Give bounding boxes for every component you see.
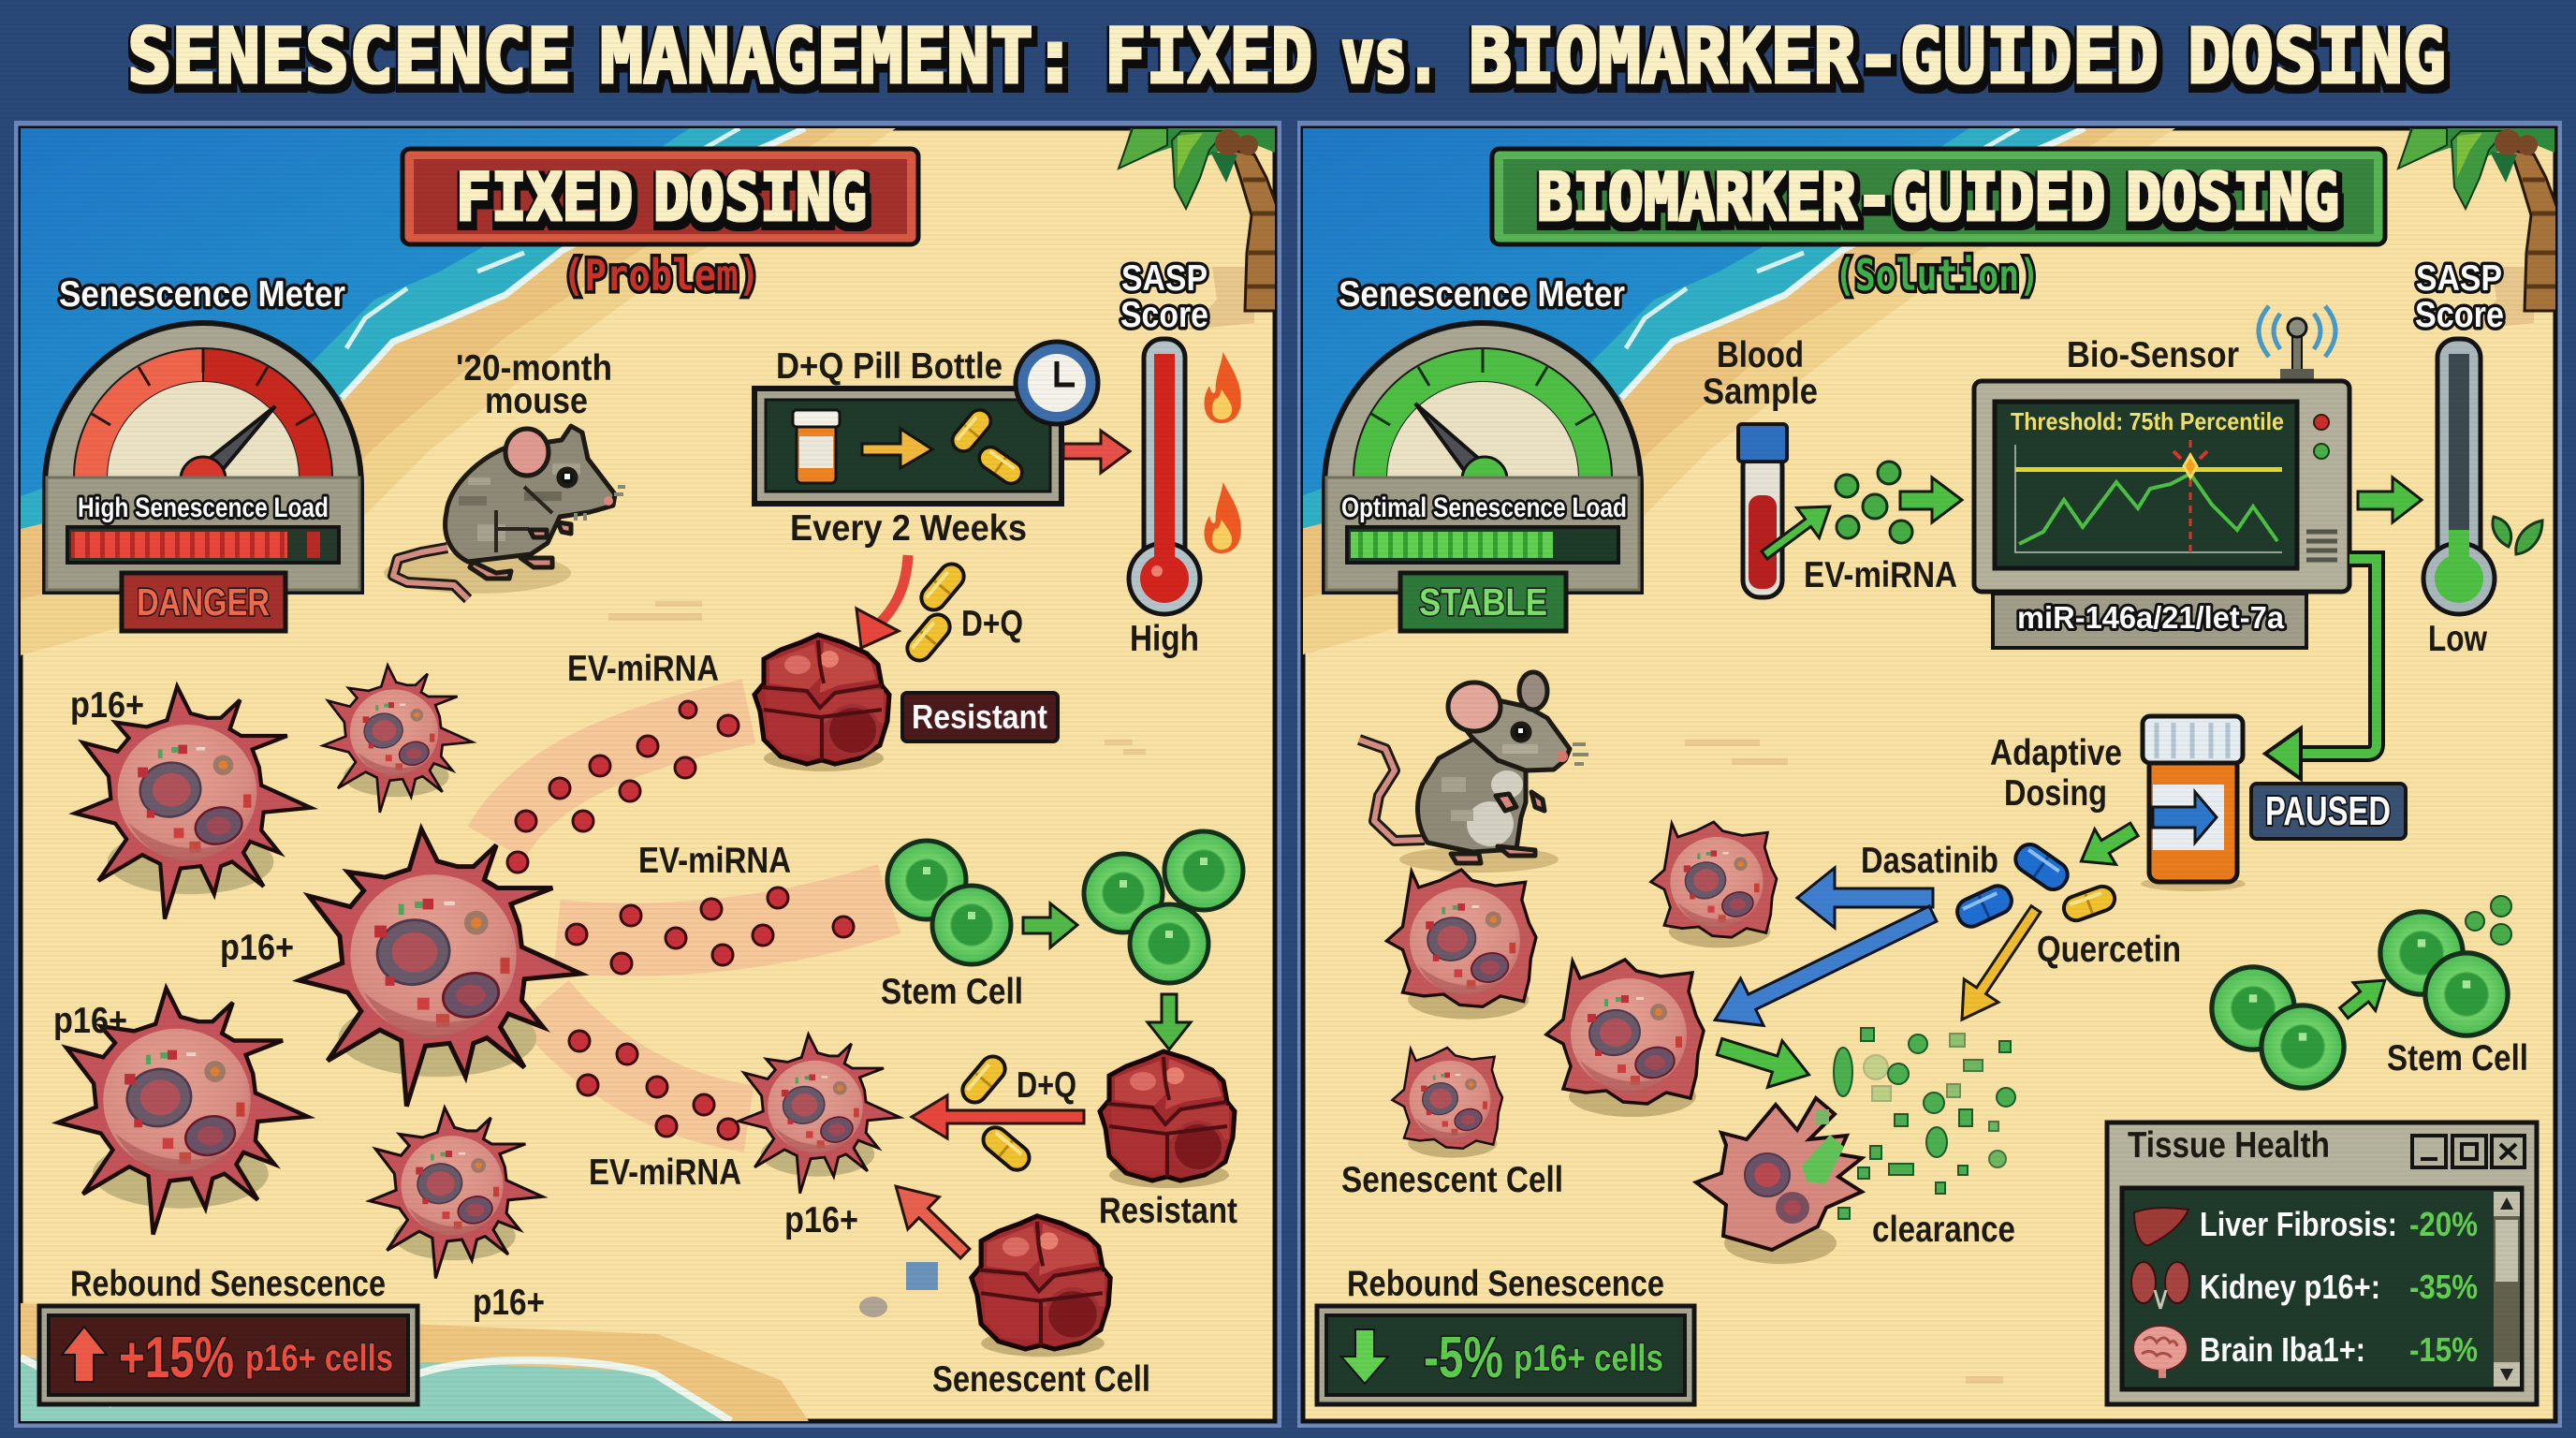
stem cells: upper pair (2380, 912, 2508, 1035)
arrow: dose to resistant cell (856, 555, 908, 648)
icon: dasatinib and quercetin pills (1953, 840, 2118, 931)
label: senescent cell: Senescent Cell (1341, 1160, 1563, 1200)
heading plate: fixed dosing: FIXED (456, 159, 633, 236)
stream: ev-mirna to p16 cell (543, 1002, 749, 1139)
arrow: stem recovery (2333, 966, 2396, 1027)
label: bio-sensor: Bio-Sensor (2067, 335, 2239, 375)
row: brain iba1+: -15% (2409, 1330, 2478, 1369)
icon: liver (2134, 1208, 2188, 1245)
labels: ev-mirna: EV-miRNA (589, 1152, 741, 1193)
icon: thermometer low (2423, 339, 2495, 614)
label: every 2 weeks: Every 2 Weeks (790, 508, 1027, 549)
badge: mirna panel: miR-146a/21/let-7a (2017, 600, 2285, 635)
senescent cells: p16+ cluster (58, 666, 900, 1278)
arrow: senescent to p16 cell (880, 1170, 981, 1269)
icon: flames (1205, 352, 1241, 553)
heading plate: fixed dosing: DOSING (653, 159, 867, 236)
arrow: dasatinib to cell (1797, 868, 1933, 928)
panel: biomarker-guided dosing (1297, 124, 2559, 1425)
panel: fixed dosing (17, 124, 1279, 1425)
arrow: sensor to adaptive dosing (2265, 559, 2377, 779)
heading plate: biomarker-guided dosing: DOSING (2126, 159, 2339, 236)
badge: resistant: Resistant (912, 697, 1047, 736)
labels: p16+: p16+ (473, 1283, 545, 1323)
labels: p16+: p16+ (70, 685, 144, 726)
label: quercetin: Quercetin (2037, 930, 2181, 970)
arrow: stem to resistant (1148, 994, 1191, 1049)
label: high: High (1130, 619, 1199, 659)
badge: paused: PAUSED (2265, 788, 2391, 834)
label: 20-month mouse: mouse (485, 381, 588, 421)
stream: ev-mirna to resistant (496, 701, 749, 873)
labels: p16+: p16+ (220, 928, 294, 968)
heading plate: fixed dosing (402, 149, 918, 244)
stem cells: right cluster (1084, 831, 1243, 983)
senescent cell: bursting (1696, 1098, 1862, 1264)
label: blood sample (1703, 335, 1818, 412)
icon: clock (1016, 342, 1098, 424)
labels: p16+: p16+ (784, 1200, 858, 1240)
gauge: optimal senescence: STABLE (1419, 580, 1547, 624)
subheading: solution: (Solution) (1835, 250, 2040, 301)
scrollbar (2494, 1192, 2520, 1387)
label: rebound senescence: Rebound Senescence (1347, 1264, 1664, 1304)
label: dasatinib: Dasatinib (1861, 841, 1998, 881)
arrow: blood to ev-mirna (1753, 492, 1841, 570)
icon: d+q pills (902, 559, 969, 666)
heading plate: biomarker-guided dosing: BIOMARKER-GUIDED (1537, 159, 2105, 236)
panel: tissue health window (2107, 1123, 2537, 1404)
label: 20-month mouse (456, 348, 612, 421)
icon: ev-mirna particles (1836, 462, 1912, 543)
row: brain iba1+ (2200, 1330, 2478, 1369)
icon: kidneys (2131, 1262, 2189, 1309)
labels: ev-mirna: EV-miRNA (567, 649, 719, 689)
labels: ev-mirna (567, 649, 791, 1193)
panel: bio-sensor monitor (1974, 381, 2349, 592)
panel: rebound result -5%: -5% (1424, 1326, 1503, 1390)
panel: tissue health window: Tissue Health (2128, 1125, 2330, 1166)
title: DOSING (2188, 13, 2446, 101)
decoration: small beach items (859, 1262, 938, 1317)
label: senescence meter: Senescence Meter (59, 274, 345, 315)
label: rebound senescence: Rebound Senescence (70, 1264, 386, 1304)
window buttons (2412, 1136, 2525, 1167)
panel: rebound result -5% (1317, 1306, 1694, 1404)
labels: p16+ (53, 685, 858, 1323)
label: stem cell: Stem Cell (2387, 1038, 2528, 1078)
arrow: quercetin to debris (1945, 898, 2053, 1031)
resistant cells (754, 635, 1235, 1357)
label: senescent cell: Senescent Cell (932, 1359, 1150, 1400)
arrow: dasatinib to large cell (1704, 890, 1944, 1044)
gauge: high senescence: DANGER (137, 580, 270, 624)
panel: rebound result +15% (39, 1306, 417, 1404)
icon: healthy mouse (1359, 672, 1588, 873)
panel: rebound result +15%: p16+ cells (245, 1338, 393, 1379)
panel: rebound result +15%: +15% (119, 1326, 234, 1390)
arrow: stem progression (1023, 903, 1077, 947)
panel: pill bottle schedule (754, 389, 1061, 504)
label: d+q: D+Q (961, 604, 1023, 644)
title: SENESCENCE (127, 13, 571, 101)
label: resistant: Resistant (1099, 1191, 1237, 1231)
label: blood sample: Sample (1703, 372, 1818, 412)
label: low: Low (2428, 619, 2488, 659)
icon: small bottle (793, 410, 840, 483)
labels: ev-mirna: EV-miRNA (638, 841, 791, 881)
badge: paused (2251, 784, 2406, 839)
label: clearance: clearance (1872, 1210, 2015, 1250)
icon: brain (2133, 1326, 2188, 1378)
label: stem cell: Stem Cell (881, 972, 1023, 1012)
label: pill bottle: D+Q Pill Bottle (776, 346, 1003, 387)
icon: thermometer high (1129, 339, 1200, 614)
label: sasp score: SASP (2416, 258, 2502, 299)
icon: antenna (2259, 306, 2335, 382)
icon: pills (948, 405, 1026, 488)
senescent cells: treated (1386, 822, 1777, 1158)
label: sasp score (1120, 258, 1208, 335)
arrow: bottle to pills (862, 429, 932, 468)
label: blood sample: Blood (1717, 335, 1804, 375)
icon: stem particles (2466, 896, 2511, 945)
icon: aged mouse (384, 426, 625, 599)
gauge: high senescence: High Senescence Load (78, 492, 329, 523)
subheading: problem: (Problem) (563, 250, 760, 301)
row: liver fibrosis: -20% (2409, 1205, 2478, 1243)
icon: leaves (2493, 517, 2542, 554)
arrow: resistant to p16 cell (912, 1095, 1084, 1138)
label: senescence meter: Senescence Meter (1339, 274, 1625, 315)
heading plate: biomarker-guided dosing (1492, 149, 2385, 244)
arrow: to thermometer (1063, 431, 1130, 473)
icon: blood tube (1738, 424, 1787, 597)
title: FIXED (1105, 13, 1312, 101)
stream: ev-mirna to stem cells (557, 888, 889, 974)
badge: mirna panel (1993, 594, 2306, 648)
stem cells: lower pair (2212, 967, 2344, 1088)
row: brain iba1+: Brain Iba1+: (2200, 1330, 2365, 1369)
label: sasp score: Score (2415, 295, 2504, 335)
label: adaptive dosing: Adaptive (1990, 733, 2122, 773)
row: kidney p16+: Kidney p16+: (2200, 1268, 2380, 1306)
gauge: optimal senescence: Optimal Senescence Load (1341, 492, 1627, 523)
stem cells: left cluster (887, 841, 1011, 964)
row: liver fibrosis: Liver Fibrosis: (2200, 1205, 2397, 1243)
label: sasp score: Score (1120, 295, 1208, 335)
icon: pills lower (958, 1051, 1034, 1175)
arrow: sensor to thermometer (2358, 477, 2422, 522)
label: adaptive dosing: Dosing (2004, 773, 2107, 814)
debris: clearance particles (1834, 1028, 2015, 1219)
title: vs. (1341, 13, 1440, 101)
arrow: cell to clearance (1712, 1023, 1816, 1098)
gauge: optimal senescence (1325, 323, 1641, 631)
row: kidney p16+: -35% (2409, 1268, 2478, 1306)
label: sasp score: SASP (1121, 258, 1208, 299)
icon: pill bottle large (2141, 716, 2246, 891)
label: d+q: D+Q (1017, 1065, 1076, 1106)
title: BIOMARKER-GUIDED (1469, 13, 2159, 101)
label: 20-month mouse: '20-month (456, 348, 612, 389)
arrow: particles to sensor (1900, 477, 1962, 522)
labels: p16+: p16+ (53, 1001, 127, 1041)
panel: bio-sensor monitor: Threshold: 75th Percentile (2011, 407, 2284, 435)
label: sasp score (2415, 258, 2504, 335)
arrow: bottle to pills (2071, 812, 2144, 879)
label: adaptive dosing (1990, 733, 2122, 814)
title: MANAGEMENT: (600, 13, 1076, 101)
label: ev-mirna: EV-miRNA (1804, 555, 1957, 595)
gauge: high senescence (45, 323, 361, 631)
panel: rebound result -5%: p16+ cells (1514, 1338, 1663, 1379)
title (127, 13, 2446, 101)
